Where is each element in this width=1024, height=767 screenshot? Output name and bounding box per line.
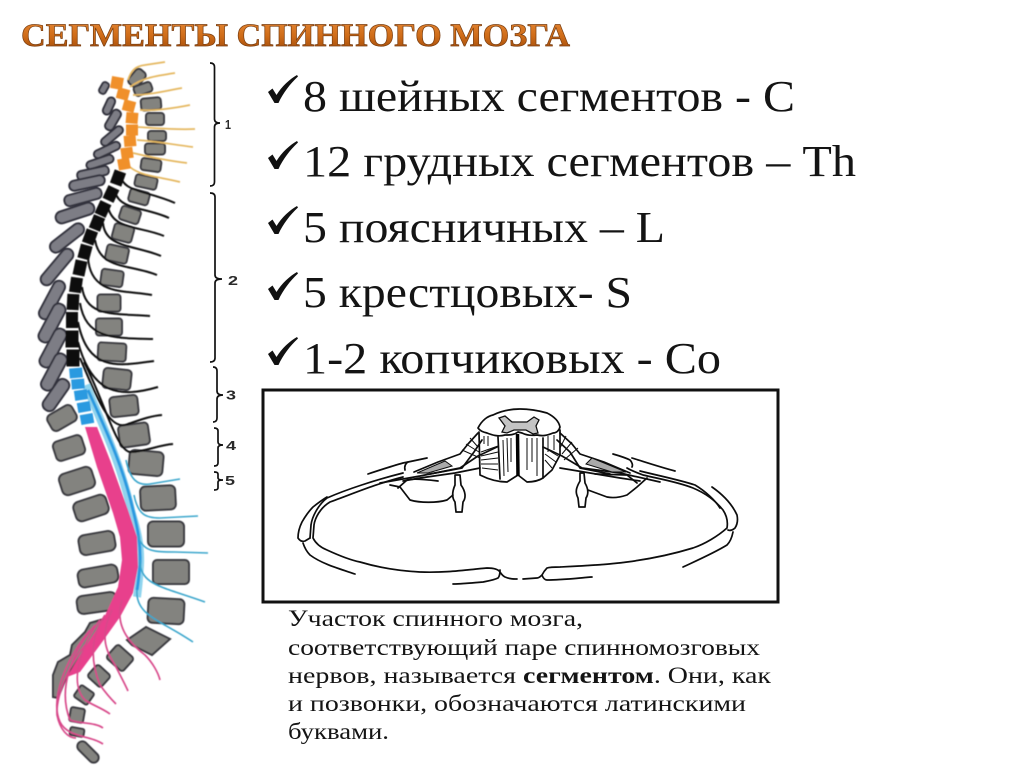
cord segments: cervical orange xyxy=(110,76,138,170)
thoracic nerves, black xyxy=(78,180,175,452)
explanatory paragraph: и позвонки, обозначаются латинскими xyxy=(288,691,746,717)
drawing: spinal cord with nerve roots and ribs xyxy=(298,409,737,584)
brace 4 with number xyxy=(214,428,237,466)
cord segments: lumbar blue xyxy=(69,367,94,425)
nerve roots, right xyxy=(543,433,660,498)
brace 5 with number: 5 xyxy=(225,473,235,488)
panel: spinal segment cross-section xyxy=(263,390,778,602)
sympathetic ganglion, right xyxy=(576,473,588,507)
brace 1 with number: 1 xyxy=(225,117,231,132)
list item: thoracic segments: 12 грудных сегментов – Th xyxy=(303,137,856,186)
brace 3 with number xyxy=(213,367,236,422)
title: СЕГМЕНТЫ СПИННОГО МОЗГА xyxy=(21,18,570,54)
blue nerve band and branches xyxy=(86,385,208,642)
brace 4 with number: 4 xyxy=(226,438,237,453)
brace 2 with number: 2 xyxy=(228,273,238,288)
brace 5 with number xyxy=(214,472,235,490)
spinous processes, left column xyxy=(36,81,125,698)
explanatory paragraph: буквами. xyxy=(288,719,389,745)
explanatory paragraph: соответствующий паре спинномозговых xyxy=(288,635,760,661)
sympathetic ganglion, left xyxy=(453,475,465,512)
list item: lumbar segments: 5 поясничных – L xyxy=(303,203,665,252)
explanatory paragraph: Участок спинного мозга, xyxy=(288,606,583,632)
ribs and body wall xyxy=(298,454,737,584)
brace 1 with number xyxy=(210,63,231,186)
cervical nerves, orange xyxy=(128,62,195,182)
pink cord and cauda equina xyxy=(57,427,160,744)
list item: sacral segments: 5 крестцовых- S xyxy=(303,268,632,317)
explanatory paragraph xyxy=(288,606,772,745)
explanatory paragraph: нервов, называется сегментом . Они, как xyxy=(288,663,772,689)
list item: coccygeal segments: 1-2 копчиковых - Со xyxy=(303,334,721,383)
spine illustration xyxy=(36,62,208,765)
brace 2 with number xyxy=(210,193,238,362)
cord segments: thoracic black xyxy=(66,169,126,366)
vertebral bodies, right column xyxy=(69,67,189,765)
brace 3 with number: 3 xyxy=(226,388,236,402)
spinal cord xyxy=(478,409,560,482)
list item: cervical segments: 8 шейных сегментов - С xyxy=(303,72,795,121)
nerve roots, left xyxy=(380,433,497,502)
